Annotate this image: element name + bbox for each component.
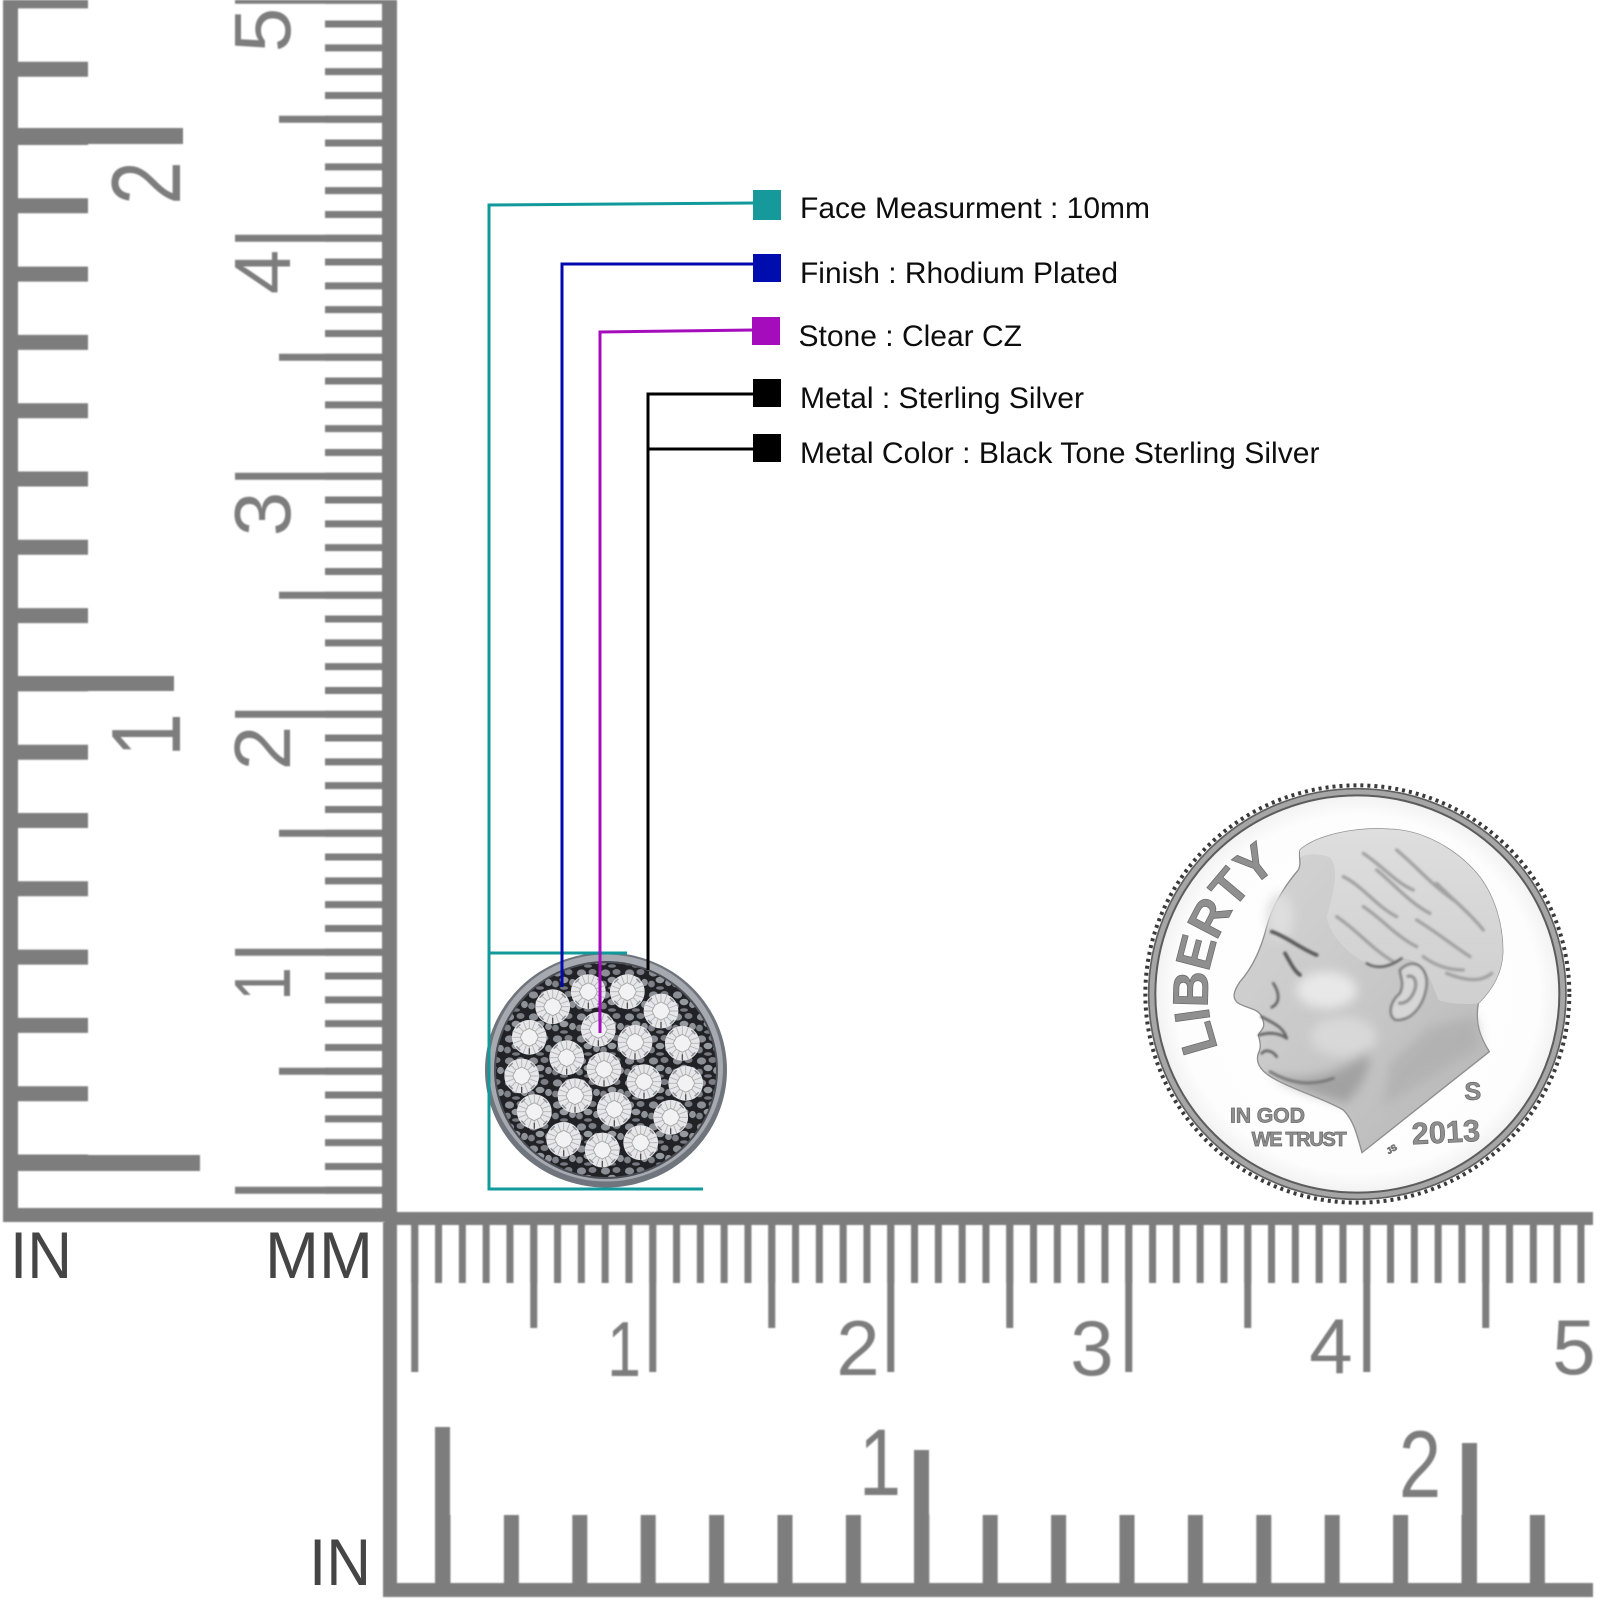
coin inscriptions xyxy=(1172,840,1481,1156)
horizontal ruler numbers: 5 xyxy=(1552,1303,1596,1391)
vertical ruler numbers: 2 xyxy=(218,726,307,770)
unit label: IN (horizontal ruler): IN xyxy=(309,1525,371,1599)
leader: face measurement xyxy=(489,203,754,1189)
legend row: stone: Stone : Clear CZ xyxy=(798,320,1022,353)
portrait xyxy=(1234,829,1503,1153)
vertical ruler numbers: 1 xyxy=(92,713,201,757)
leader: metal and metal colour xyxy=(648,394,754,970)
pendant: round pave disc with stones xyxy=(485,952,727,1188)
unit label: MM: MM xyxy=(265,1218,373,1292)
leader: stone xyxy=(600,330,754,1033)
coin inscriptions: S xyxy=(1464,1078,1481,1106)
horizontal ruler numbers xyxy=(607,1302,1596,1518)
horizontal ruler numbers: 2 xyxy=(836,1304,880,1392)
vertical ruler numbers: 3 xyxy=(218,492,307,536)
horizontal ruler numbers: 3 xyxy=(1070,1304,1114,1392)
horizontal ruler numbers: 1 xyxy=(607,1306,641,1393)
leader: finish xyxy=(562,264,754,987)
coin inscriptions: 2013 xyxy=(1411,1114,1481,1151)
legend row: finish: Finish : Rhodium Plated xyxy=(800,257,1118,290)
legend row: metal: Metal : Sterling Silver xyxy=(800,382,1084,415)
horizontal ruler numbers: 1 xyxy=(859,1410,901,1516)
vertical ruler numbers: 2 xyxy=(92,161,201,205)
vertical ruler numbers: 4 xyxy=(218,250,307,294)
dime coin for scale xyxy=(1143,783,1572,1205)
coin inscriptions: WE TRUST xyxy=(1252,1129,1347,1151)
ruler: vertical inches and millimetres xyxy=(3,0,397,1222)
vertical ruler numbers: 5 xyxy=(218,8,307,52)
coin inscriptions: JS xyxy=(1385,1142,1399,1156)
horizontal ruler numbers: 2 xyxy=(1399,1412,1441,1518)
coin inscriptions: IN GOD xyxy=(1230,1104,1305,1128)
legend row: metal colour: Metal Color : Black Tone Sterling Silver xyxy=(800,437,1320,470)
vertical ruler numbers xyxy=(92,8,307,1001)
ruler: horizontal millimetres and inches xyxy=(383,1212,1596,1597)
horizontal ruler numbers: 4 xyxy=(1309,1302,1353,1390)
vertical ruler numbers: 1 xyxy=(218,967,307,1001)
coin inscriptions: LIBERTY xyxy=(1172,840,1268,1056)
legend row: face measurement: Face Measurment : 10mm xyxy=(800,192,1150,225)
unit label: IN (vertical ruler): IN xyxy=(10,1218,72,1292)
